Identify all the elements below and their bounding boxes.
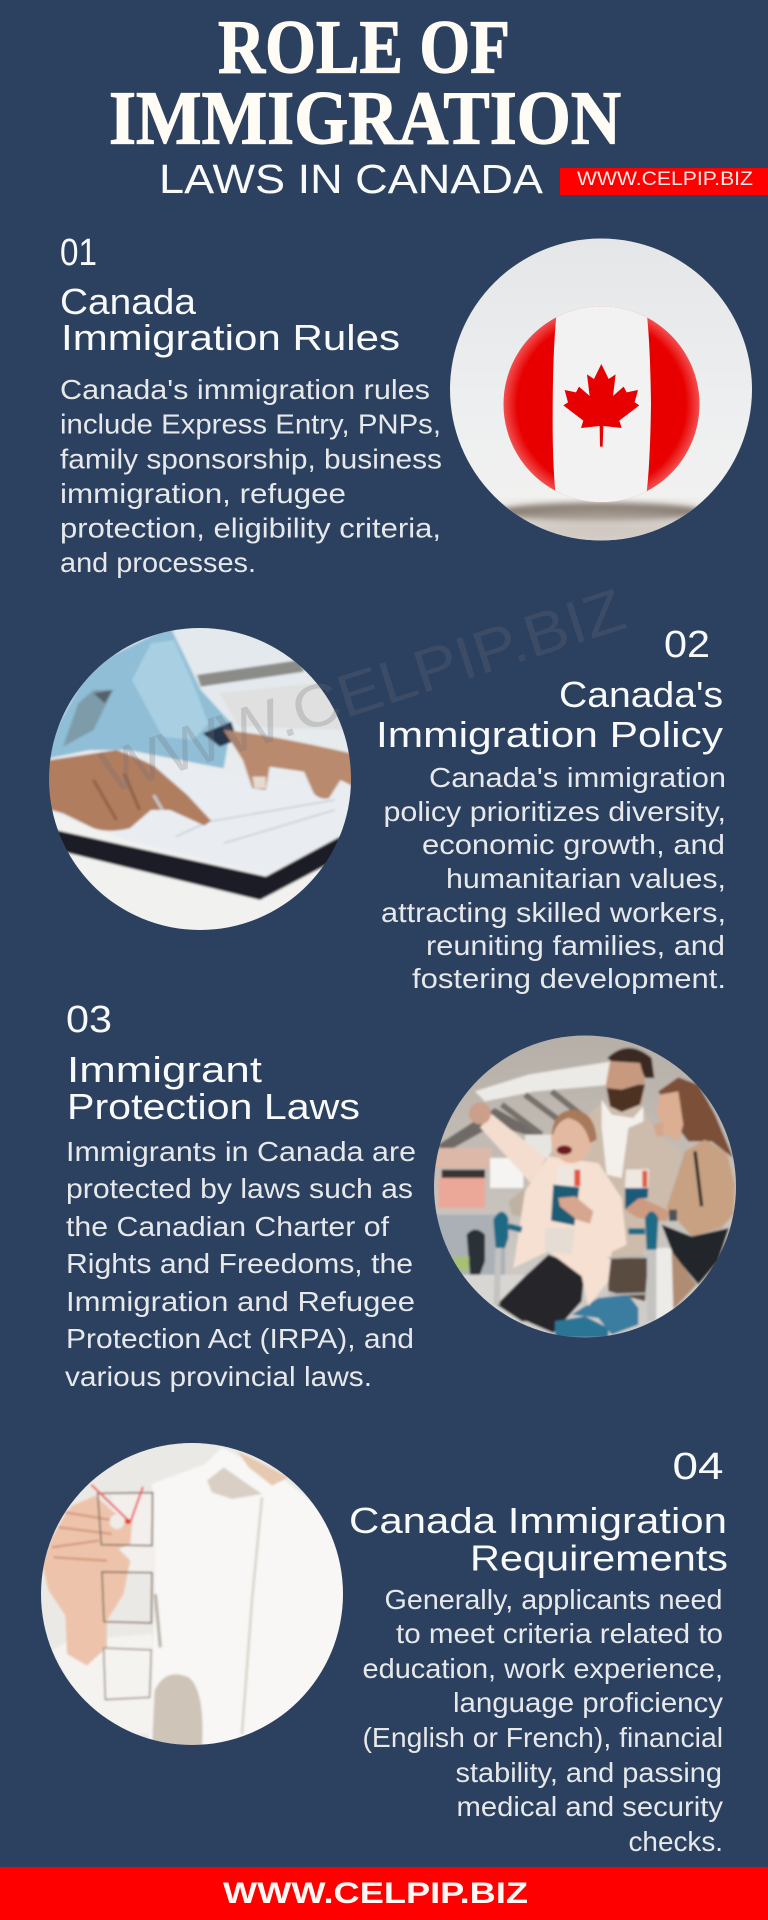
body text 03: Rights and Freedoms, the	[66, 1248, 413, 1279]
body text 01: protection, eligibility criteria,	[60, 513, 441, 544]
watermark: WWW.CELPIP.BIZ	[92, 576, 633, 806]
body text 02: humanitarian values,	[446, 863, 726, 894]
panel: section 02	[32, 613, 726, 994]
body text 02: attracting skilled workers,	[381, 897, 726, 928]
panel: section 03	[65, 999, 748, 1392]
panel: section 01	[60, 232, 757, 578]
heading 03	[67, 1049, 360, 1127]
footer bar: WWW.CELPIP.BIZ	[223, 1877, 528, 1910]
body text 03: Immigration and Refugee	[66, 1286, 415, 1317]
body text 04: Generally, applicants need	[384, 1584, 722, 1615]
body text 03	[65, 1136, 416, 1392]
body text 01: and processes.	[60, 547, 256, 578]
heading 02: Immigration Policy	[376, 714, 723, 755]
heading 01: Immigration Rules	[61, 317, 400, 358]
photo: hand ticking checklist	[41, 1443, 343, 1745]
body text 04: to meet criteria related to	[396, 1618, 723, 1649]
number 01: 01	[60, 232, 97, 274]
body text 01: Canada's immigration rules	[60, 374, 430, 405]
body text 02: economic growth, and	[422, 829, 725, 860]
body text 03: protected by laws such as	[66, 1173, 413, 1204]
body text 01: family sponsorship, business	[60, 443, 442, 474]
subtitle: LAWS IN CANADA	[159, 156, 544, 202]
body text 02: fostering development.	[412, 963, 726, 994]
heading 04: Requirements	[470, 1538, 728, 1579]
website badge: WWW.CELPIP.BIZ	[577, 169, 753, 190]
body text 01: immigration, refugee	[60, 478, 346, 509]
photo: Canada flag ball	[445, 235, 757, 548]
body text 01	[60, 374, 442, 578]
title	[109, 6, 621, 160]
heading 04	[349, 1500, 728, 1579]
body text 03: the Canadian Charter of	[66, 1211, 389, 1242]
heading 04: Canada Immigration	[349, 1500, 727, 1541]
photo: family at airport	[434, 1036, 736, 1338]
heading 03: Protection Laws	[67, 1086, 360, 1127]
website badge	[560, 168, 768, 195]
title: IMMIGRATION	[109, 76, 621, 160]
body text 03: various provincial laws.	[65, 1361, 372, 1392]
body text 04: stability, and passing	[456, 1757, 722, 1788]
body text 04: checks.	[628, 1826, 723, 1857]
title: ROLE OF	[218, 6, 510, 90]
body text 04: (English or French), financial	[362, 1722, 723, 1753]
body text 04: medical and security	[456, 1791, 723, 1822]
heading 02	[376, 674, 723, 755]
photo: hands on document	[49, 628, 351, 930]
panel: section 04	[29, 1431, 728, 1857]
body text 02: Canada's immigration	[429, 762, 726, 793]
heading 03: Immigrant	[67, 1049, 262, 1090]
number 03: 03	[66, 999, 112, 1041]
number 04: 04	[672, 1446, 724, 1488]
body text 03: Immigrants in Canada are	[66, 1136, 416, 1167]
heading 01: Canada	[60, 281, 197, 322]
body text 03: Protection Act (IRPA), and	[66, 1323, 414, 1354]
body text 02: reuniting families, and	[426, 930, 725, 961]
body text 01: include Express Entry, PNPs,	[60, 409, 441, 440]
heading 01	[60, 281, 400, 358]
footer bar	[0, 1867, 768, 1920]
number 02: 02	[664, 624, 710, 666]
body text 04	[362, 1584, 723, 1857]
heading 02: Canada's	[559, 674, 723, 715]
body text 04: language proficiency	[453, 1687, 723, 1718]
body text 02	[381, 762, 726, 994]
body text 04: education, work experience,	[362, 1653, 723, 1684]
body text 02: policy prioritizes diversity,	[384, 796, 726, 827]
